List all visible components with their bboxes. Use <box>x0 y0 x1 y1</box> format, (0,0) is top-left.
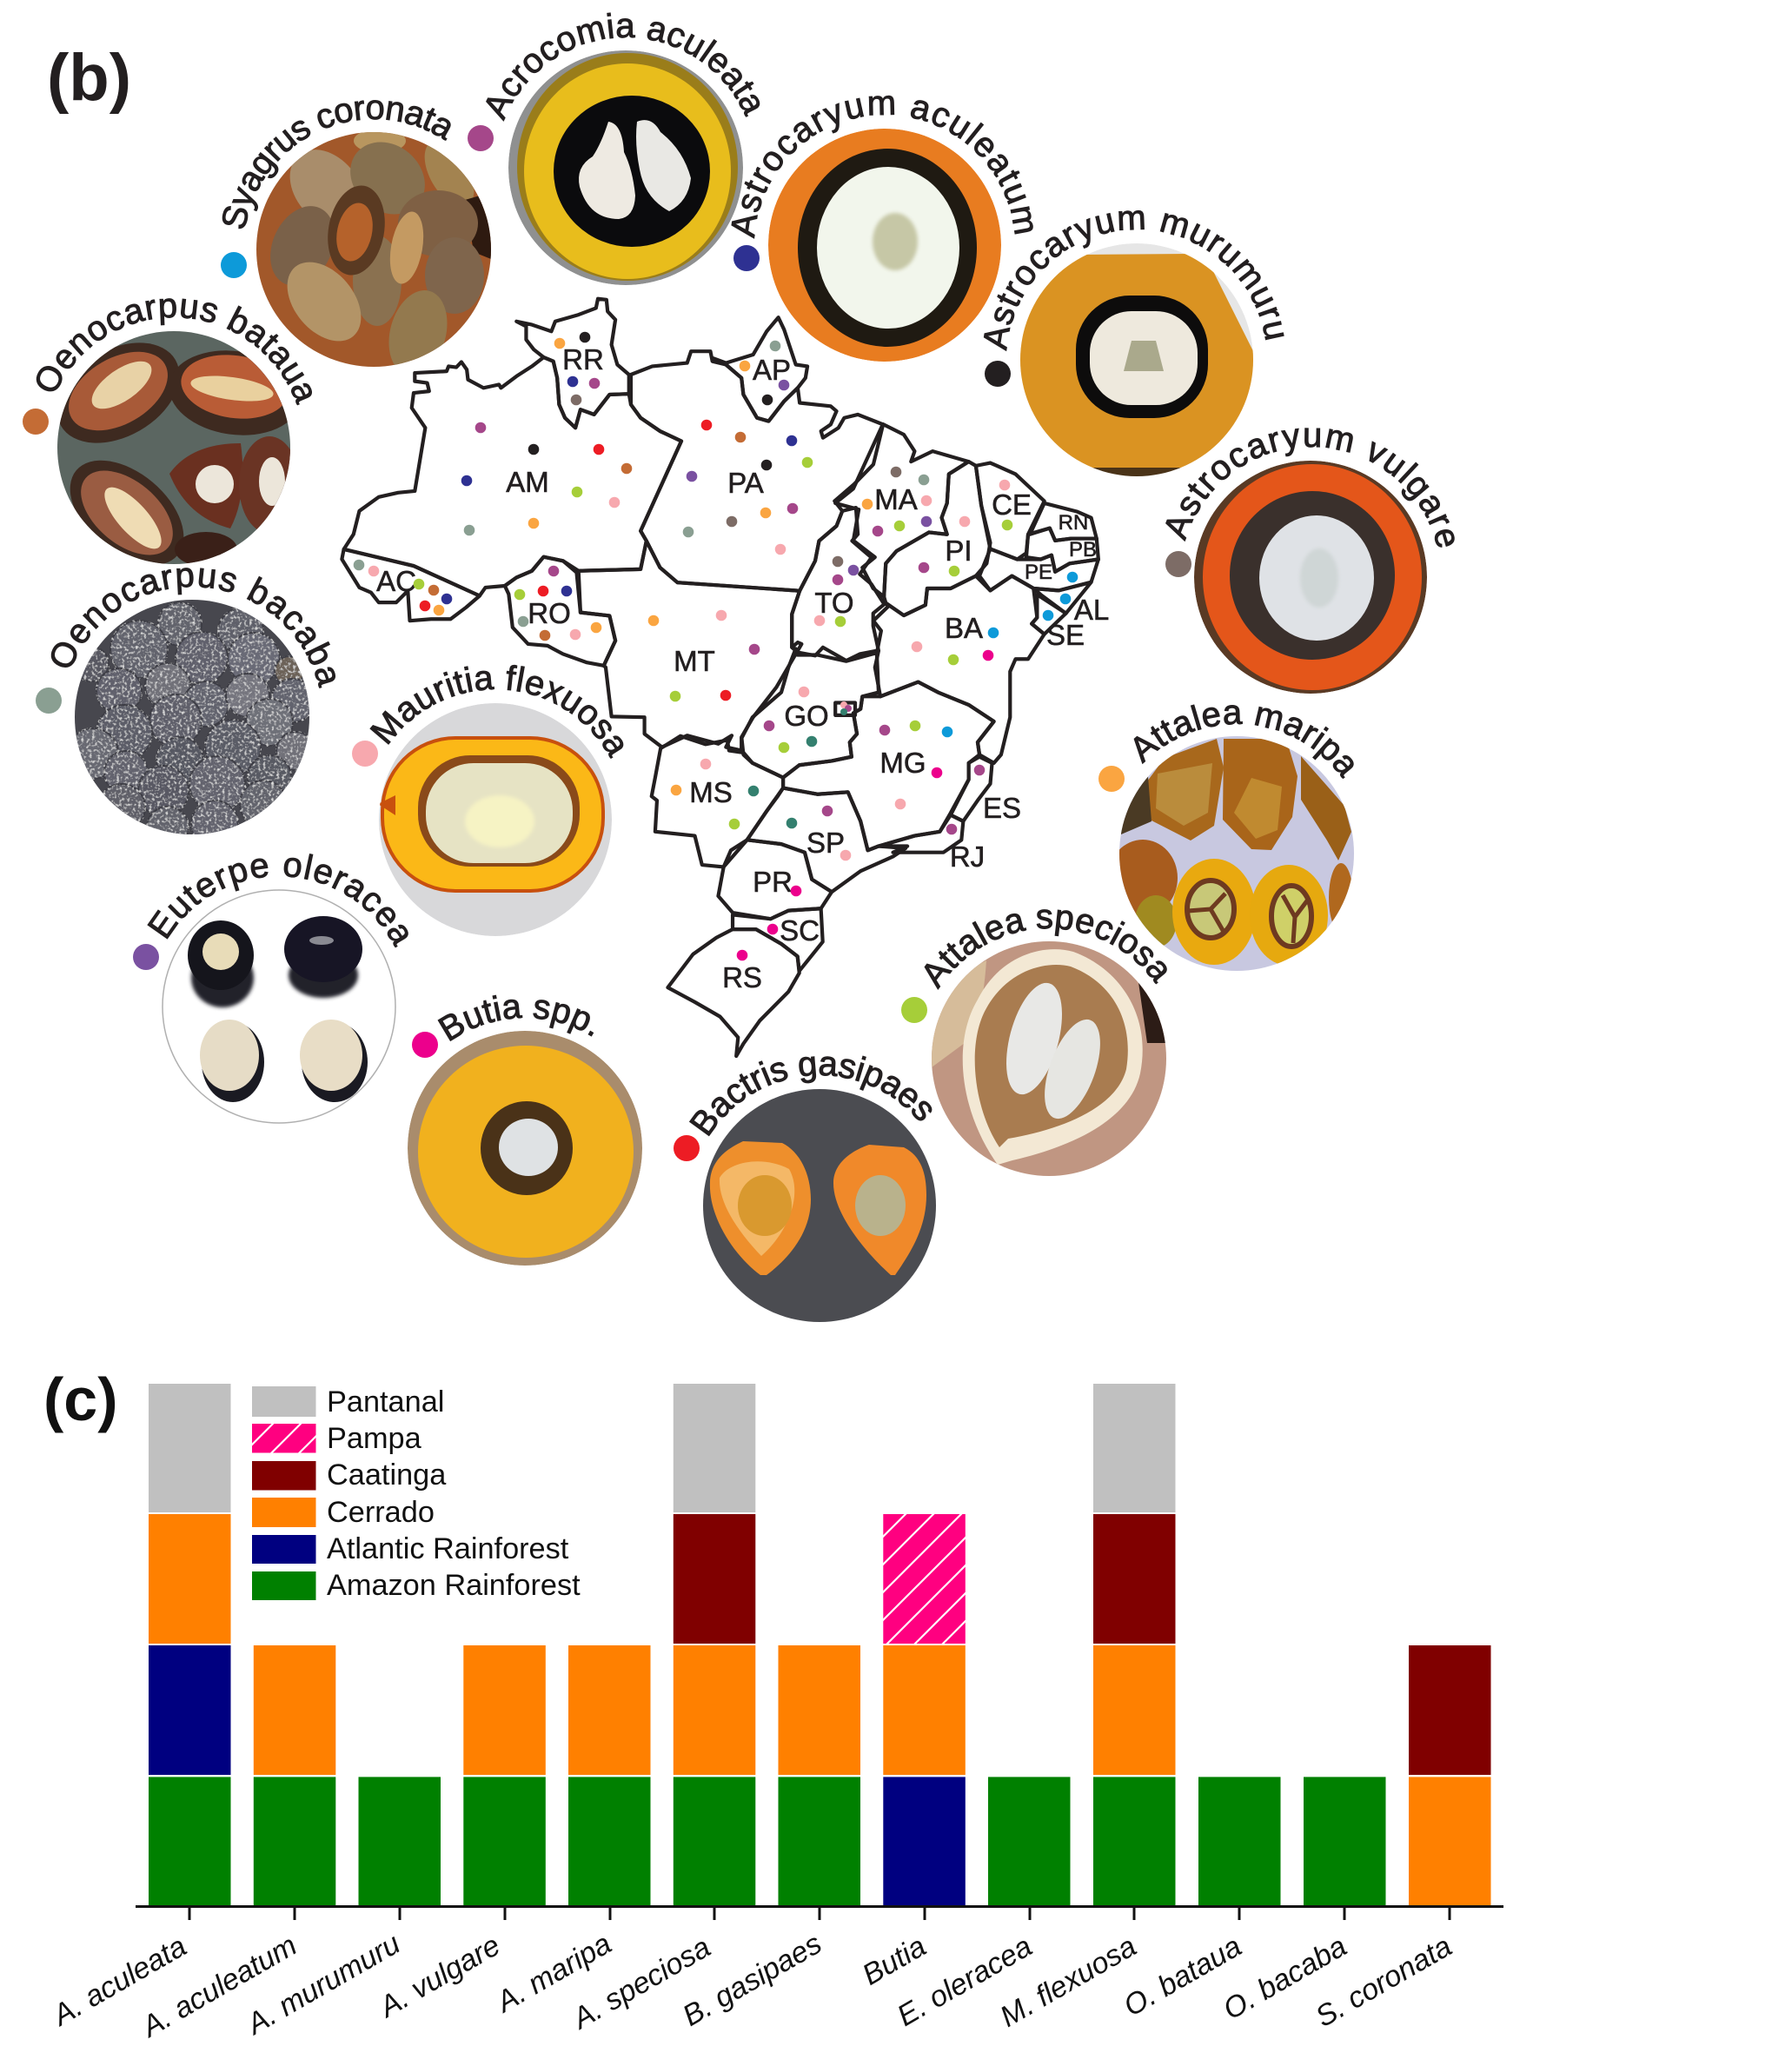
bar: A. murumuru <box>358 1777 441 1906</box>
bar: A. speciosa <box>674 1384 755 1906</box>
state labels: MA <box>874 483 918 515</box>
x axis labels: A. murumuru <box>240 1927 406 2042</box>
x axis labels: S. coronata <box>1310 1930 1457 2034</box>
key: Syagrus coronata <box>221 100 451 278</box>
bar: A. maripa <box>568 1645 650 1906</box>
panel label (c): (c) <box>43 1365 118 1433</box>
key: Mauritia flexuosa: Mauritia flexuosa <box>369 664 624 759</box>
photo: Oenocarpus bacaba <box>75 600 309 834</box>
state labels: GO <box>784 700 829 732</box>
photo: Astrocaryum aculeatum <box>768 129 1001 362</box>
x axis labels: O. bacaba <box>1218 1930 1352 2026</box>
photo: Astrocaryum vulgare <box>1194 461 1427 694</box>
key: Astrocaryum vulgare: Astrocaryum vulgare <box>1165 428 1455 548</box>
photo: Oenocarpus bataua <box>57 331 290 564</box>
bar: B. gasipaes <box>779 1645 860 1906</box>
state labels: ES <box>983 792 1021 824</box>
legend item: Pantanal <box>252 1385 444 1418</box>
photo: Astrocaryum murumuru <box>1017 243 1256 478</box>
state labels <box>376 343 1109 993</box>
bar: A. aculeata <box>149 1384 231 1906</box>
map of Brazil <box>342 299 1109 1056</box>
photo: Butia spp. <box>408 1031 642 1266</box>
photo: Bactris gasipaes <box>700 1086 939 1326</box>
species names and colour keys <box>23 12 1455 1161</box>
state labels: MG <box>879 747 926 779</box>
panel label (b): (b) <box>47 41 131 115</box>
state labels: MS <box>689 776 733 808</box>
legend item: Pampa: Pampa <box>327 1422 422 1455</box>
legend item: Cerrado <box>252 1496 435 1529</box>
state labels: RR <box>562 343 604 375</box>
photo: Attalea speciosa <box>930 939 1169 1178</box>
key: Astrocaryum murumuru: Astrocaryum murumuru <box>984 210 1284 351</box>
photo: Acrocomia aculeata <box>508 50 743 285</box>
state labels: MT <box>674 645 715 677</box>
key: Astrocaryum aculeatum: Astrocaryum aculeatum <box>731 96 1033 239</box>
legend item: Cerrado: Cerrado <box>327 1496 435 1529</box>
state labels: PI <box>945 535 972 567</box>
key: Butia spp.: Butia spp. <box>438 994 594 1041</box>
bar: O. bacaba <box>1304 1777 1385 1906</box>
state labels: TO <box>814 587 854 619</box>
key: Attalea maripa: Attalea maripa <box>1133 704 1354 779</box>
state labels: RJ <box>950 840 985 873</box>
key: Butia spp. <box>412 930 619 1112</box>
occurrence dots <box>354 332 1078 960</box>
state labels: SP <box>806 827 845 859</box>
x axis labels: A. aculeata <box>46 1930 192 2033</box>
key: Mauritia flexuosa <box>352 596 647 862</box>
bar: Butia <box>883 1514 966 1906</box>
bar: M. flexuosa <box>1093 1384 1175 1906</box>
photo: Euterpe oleracea <box>163 890 395 1123</box>
photo: Syagrus coronata <box>256 132 491 367</box>
state labels: BA <box>945 612 983 644</box>
state labels: PR <box>753 866 793 898</box>
x axis labels: E. oleracea <box>892 1930 1038 2033</box>
legend item: Caatinga <box>252 1458 447 1492</box>
state labels: PA <box>727 467 764 499</box>
legend item: Pampa <box>252 1422 422 1455</box>
state labels: RS <box>722 961 762 993</box>
photo: Attalea maripa <box>1119 736 1354 971</box>
x axis labels: A. vulgare <box>373 1929 506 2024</box>
x axis labels: B. gasipaes <box>677 1927 827 2033</box>
bar: E. oleracea <box>988 1777 1071 1906</box>
key: Bactris gasipaes <box>674 1055 932 1161</box>
key: Bactris gasipaes: Bactris gasipaes <box>688 1055 932 1137</box>
key: Oenocarpus bataua <box>23 236 346 495</box>
x axis labels: O. bataua <box>1118 1930 1247 2023</box>
photo: Mauritia flexuosa <box>378 703 612 936</box>
legend item: Atlantic Rainforest: Atlantic Rainforest <box>327 1532 569 1565</box>
bar: A. aculeatum <box>254 1645 335 1906</box>
key: Oenocarpus bacaba: Oenocarpus bacaba <box>50 568 335 688</box>
key: Acrocomia aculeata: Acrocomia aculeata <box>486 12 760 122</box>
x axis labels: A. maripa <box>489 1927 617 2020</box>
state labels: RO <box>528 597 571 629</box>
key: Oenocarpus bacaba <box>36 511 374 764</box>
state borders north <box>342 299 889 750</box>
key: Syagrus coronata: Syagrus coronata <box>222 100 451 229</box>
legend <box>252 1385 581 1602</box>
legend item: Pantanal: Pantanal <box>327 1385 444 1418</box>
x axis labels: A. speciosa <box>566 1930 716 2036</box>
key: Attalea speciosa <box>901 909 1167 1023</box>
stacked bar chart of biomes <box>46 1384 1503 2044</box>
x axis labels: M. flexuosa <box>994 1930 1142 2034</box>
state labels: RN <box>1059 511 1088 535</box>
state borders northeast, centre and south <box>652 424 1098 1056</box>
state labels: SE <box>1046 619 1085 651</box>
x axis labels <box>46 1927 1457 2044</box>
key: Attalea speciosa: Attalea speciosa <box>925 909 1167 990</box>
bar: O. bataua <box>1198 1777 1281 1906</box>
legend item: Amazon Rainforest: Amazon Rainforest <box>327 1569 581 1602</box>
x axis and ticks <box>136 1906 1503 1920</box>
bar: S. coronata <box>1409 1645 1491 1906</box>
legend item: Caatinga: Caatinga <box>327 1458 447 1492</box>
state labels: SC <box>780 914 820 947</box>
state labels: CE <box>992 488 1032 521</box>
x axis labels: Butia <box>857 1930 932 1992</box>
state labels: AM <box>506 466 549 498</box>
state labels: PE <box>1025 561 1052 584</box>
key: Euterpe oleracea <box>133 787 435 1050</box>
state labels: AL <box>1074 594 1109 626</box>
key: Oenocarpus bataua: Oenocarpus bataua <box>37 298 312 405</box>
state labels: AP <box>753 354 791 386</box>
bar: A. vulgare <box>463 1645 546 1906</box>
x axis labels: A. aculeatum <box>135 1929 302 2044</box>
state labels: AC <box>376 565 416 597</box>
key: Euterpe oleracea: Euterpe oleracea <box>147 854 408 947</box>
state labels: PB <box>1069 538 1097 561</box>
